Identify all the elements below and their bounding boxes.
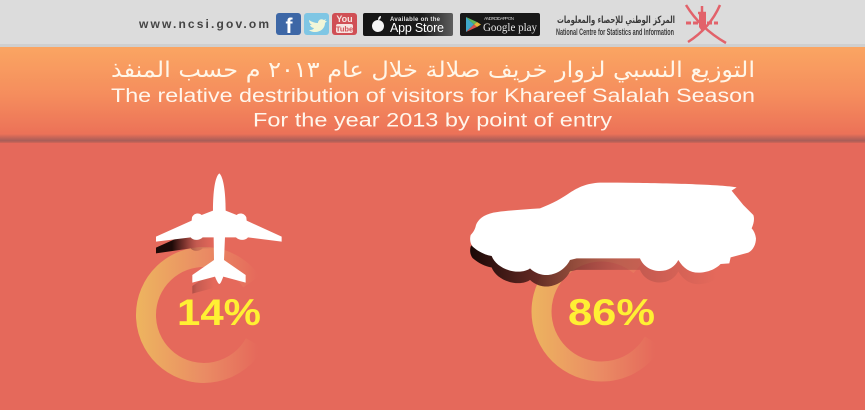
progress ring: land <box>542 252 654 372</box>
icon: youtube: Tube <box>336 24 353 34</box>
button: app store: App Store <box>390 21 444 35</box>
website address: www.ncsi.gov.om <box>138 17 269 31</box>
header bar <box>0 0 865 47</box>
panel: air entry <box>146 173 282 373</box>
value: 86%: 86% <box>568 292 655 333</box>
organisation name: National Centre for Statistics and Information <box>556 27 674 37</box>
icon: youtube <box>332 13 357 35</box>
icon: plane <box>156 173 282 284</box>
organisation name: المركز الوطني للإحصاء والمعلومات <box>557 15 675 26</box>
icon: facebook <box>276 13 301 38</box>
button: app store: Available on the <box>390 17 441 23</box>
organisation name <box>556 15 675 37</box>
panel: land entry <box>470 183 756 372</box>
progress ring: air <box>146 257 255 373</box>
plane shadow <box>156 204 282 295</box>
value: 14%: 14% <box>177 292 261 333</box>
icon: twitter <box>304 13 329 35</box>
english title line 1: The relative destribution of visitors for Khareef Salalah Season <box>111 86 755 107</box>
title band <box>0 47 865 143</box>
button: app store <box>363 13 453 36</box>
icon: car <box>470 183 756 275</box>
english title line 2: For the year 2013 by point of entry <box>253 110 613 132</box>
button: google play: ANDROID APP ON <box>484 16 514 21</box>
icon: youtube: You <box>336 14 353 24</box>
button: google play: Google play <box>483 20 537 34</box>
icon: national emblem <box>686 5 726 43</box>
button: google play <box>460 13 540 36</box>
car shadow <box>470 194 756 286</box>
icon: facebook: f <box>286 15 294 38</box>
arabic title: التوزيع النسبي لزوار خريف صلالة خلال عام ٢٠١٣ م حسب المنفذ <box>111 58 755 83</box>
